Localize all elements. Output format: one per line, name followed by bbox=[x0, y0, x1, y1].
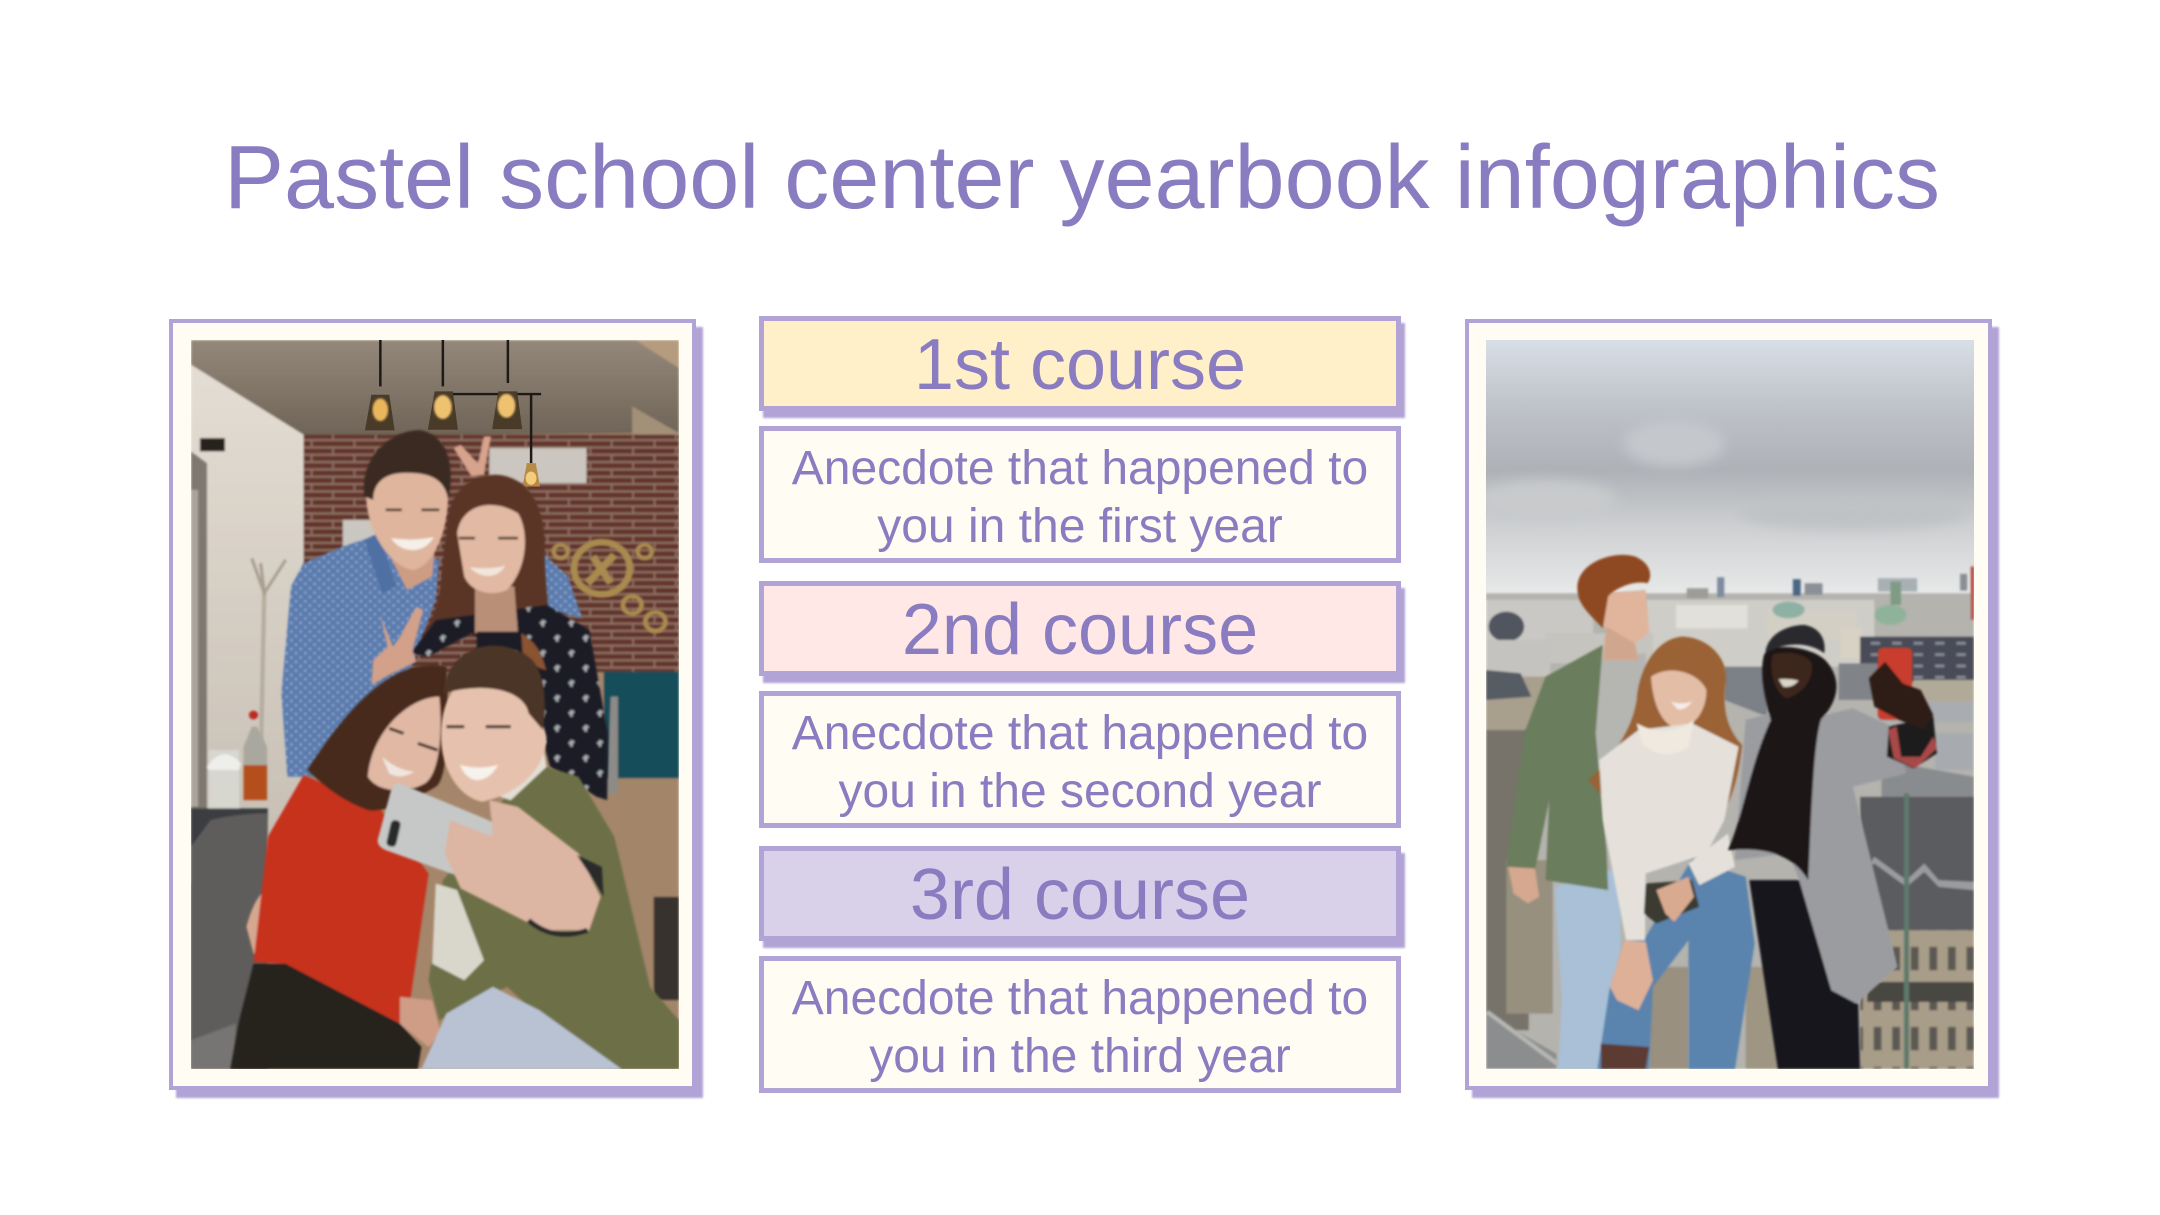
panel: second course anecdote: you in the second year bbox=[838, 765, 1321, 818]
clouds bbox=[1474, 420, 1967, 530]
young woman in white sweater bbox=[1589, 637, 1755, 1069]
man in blue shirt bbox=[281, 430, 582, 777]
young man in green shirt bbox=[1506, 555, 1653, 1069]
city skyline bbox=[1486, 567, 1974, 1069]
panel: right photo frame bbox=[1465, 319, 1992, 1090]
panel: first course heading bbox=[759, 316, 1401, 411]
panel: left photo frame bbox=[169, 319, 696, 1090]
panel: third course anecdote bbox=[759, 956, 1401, 1093]
photo: four friends taking a selfie indoors bbox=[191, 340, 679, 1069]
sky bbox=[1486, 340, 1974, 600]
panel: third course anecdote: you in the third year bbox=[869, 1030, 1291, 1083]
phone and hand bbox=[378, 783, 604, 934]
panel: first course anecdote: you in the first year bbox=[877, 500, 1283, 553]
panel: first course anecdote: Anecdote that happened to bbox=[792, 442, 1368, 495]
panel: first course heading: 1st course bbox=[914, 325, 1246, 405]
room background bbox=[191, 340, 679, 1069]
woman in red top bbox=[230, 665, 448, 1069]
wall gears bbox=[554, 542, 665, 631]
panel: second course heading bbox=[759, 581, 1401, 676]
pendant lamps bbox=[365, 340, 541, 486]
panel: third course anecdote: Anecdote that happened to bbox=[792, 972, 1368, 1025]
woman with long brown hair bbox=[371, 475, 608, 800]
panel: second course anecdote: Anecdote that happened to bbox=[792, 707, 1368, 760]
title: Pastel school center yearbook infographics bbox=[224, 128, 1940, 228]
man in olive jacket bbox=[421, 645, 679, 1069]
panel: third course heading bbox=[759, 846, 1401, 941]
panel: third course heading: 3rd course bbox=[910, 855, 1250, 935]
table, bottle and armchair bbox=[191, 711, 268, 1069]
panel: second course anecdote bbox=[759, 691, 1401, 828]
panel: first course anecdote bbox=[759, 426, 1401, 563]
panel: second course heading: 2nd course bbox=[902, 590, 1258, 670]
woman in grey cardigan with phone bbox=[1728, 625, 1937, 1069]
photo: three friends taking a selfie on a Paris rooftop bbox=[1486, 340, 1974, 1069]
